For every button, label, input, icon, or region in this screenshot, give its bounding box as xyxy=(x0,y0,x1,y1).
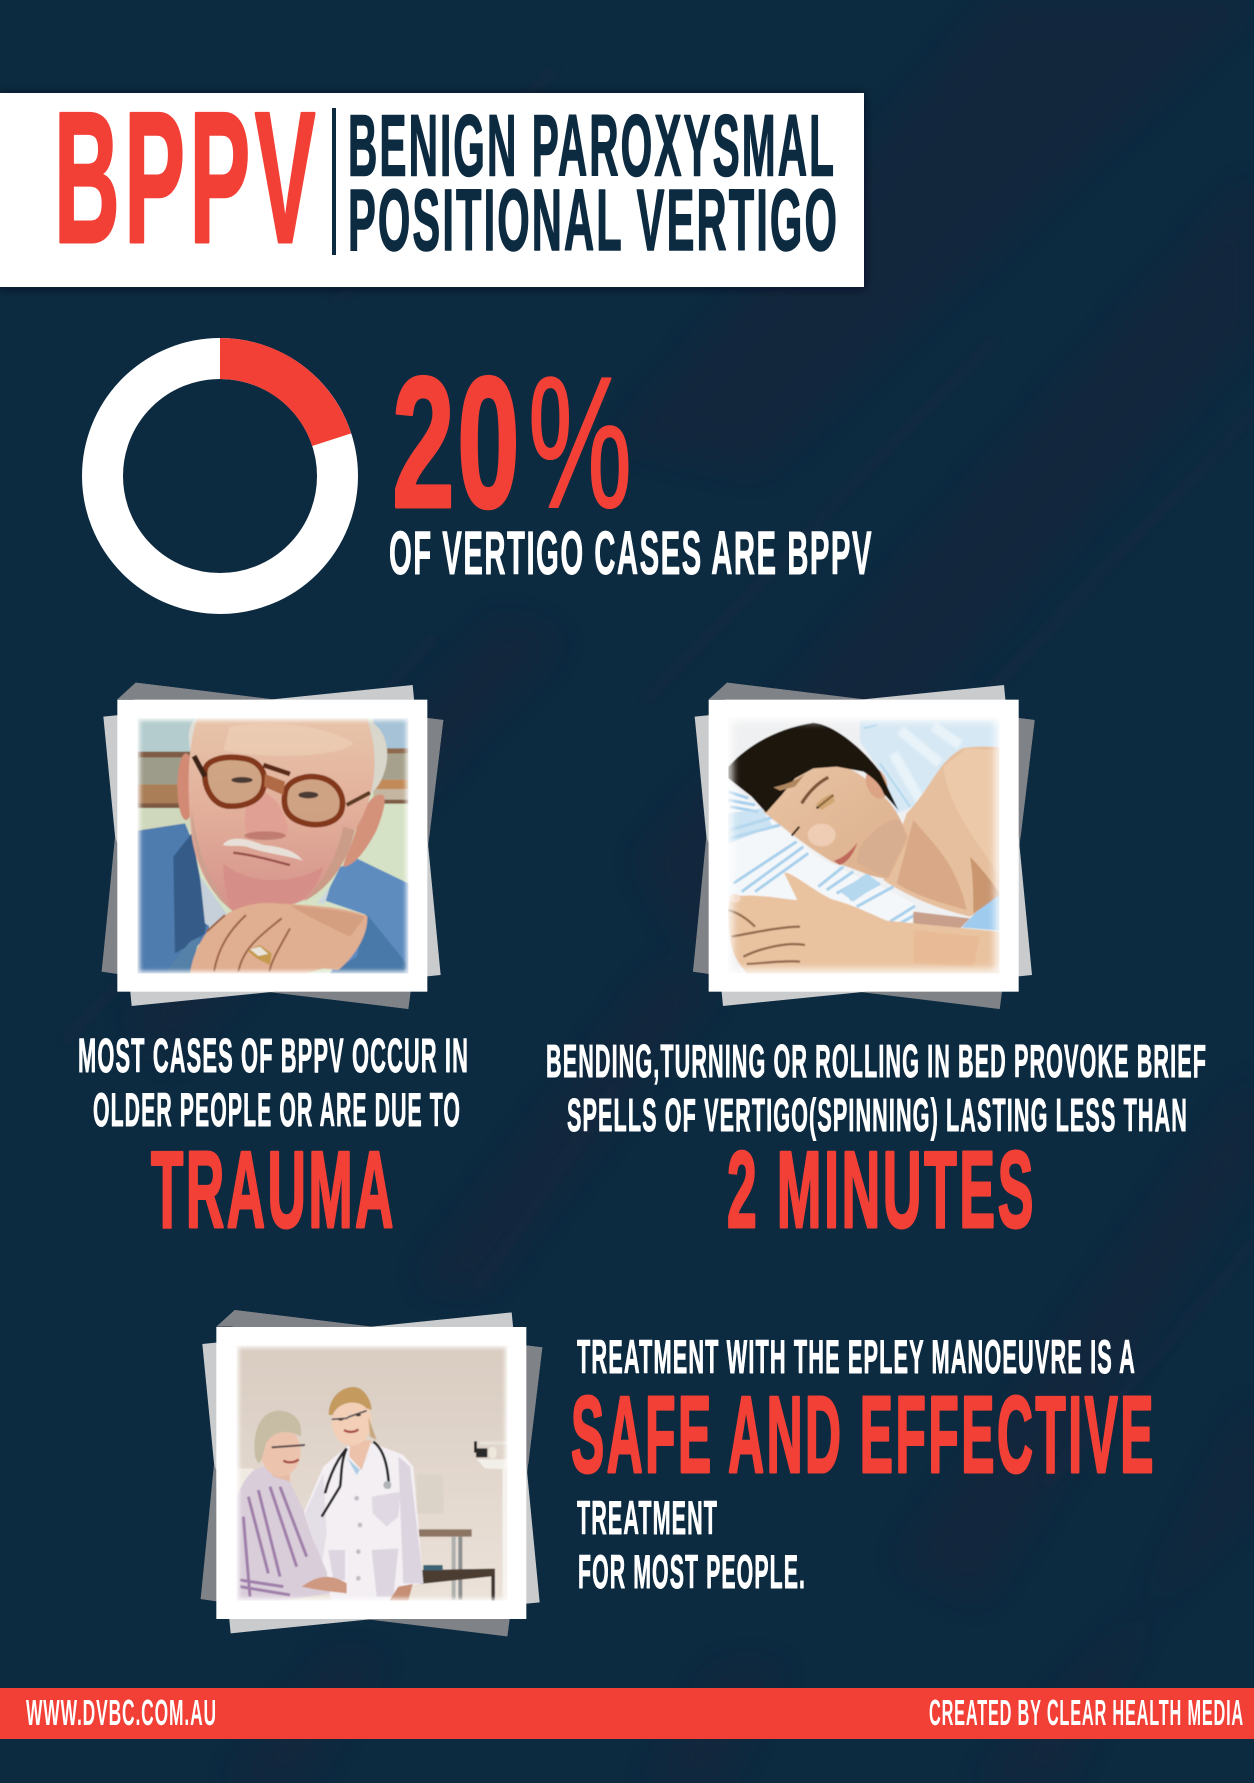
donut chart: 20% xyxy=(102,358,338,594)
body text: treatment: TREATMENT xyxy=(577,1491,718,1544)
doctor's head xyxy=(349,1440,372,1470)
patient xyxy=(237,1467,330,1601)
sweater left xyxy=(138,823,210,973)
torso xyxy=(883,747,999,917)
text: OLDER PEOPLE OR ARE DUE TO xyxy=(93,1083,461,1136)
body text: older people xyxy=(78,1030,469,1251)
body text: symptoms xyxy=(546,1035,1207,1251)
sheet and arm xyxy=(913,912,970,928)
hand xyxy=(190,903,367,973)
footer bar xyxy=(0,1688,1254,1739)
body text: treatment xyxy=(571,1330,1156,1598)
sweater right xyxy=(323,858,408,973)
back pillow xyxy=(860,720,999,813)
face xyxy=(189,718,375,912)
hair xyxy=(188,718,197,750)
front pillow xyxy=(740,800,913,920)
body text: older people: TRAUMA xyxy=(151,1129,396,1251)
footer bar: WWW.DVBC.COM.AU xyxy=(26,1692,217,1733)
moustache xyxy=(223,839,303,861)
face xyxy=(763,762,908,878)
photo card: man sleeping xyxy=(693,683,1035,1009)
glasses xyxy=(205,757,343,825)
ears xyxy=(177,752,190,820)
text: MOST CASES OF BPPV OCCUR IN xyxy=(78,1030,469,1083)
title banner: BPPV xyxy=(54,73,320,282)
collar xyxy=(200,877,227,928)
doctor xyxy=(303,1443,423,1601)
stat: 20%: % xyxy=(528,338,632,547)
title banner xyxy=(0,73,864,287)
scale xyxy=(503,1467,505,1600)
hair xyxy=(728,723,898,813)
tables xyxy=(418,1528,472,1538)
body text: treatment: FOR MOST PEOPLE. xyxy=(578,1545,806,1598)
photo card: older man xyxy=(102,683,443,1009)
patient's head xyxy=(272,1474,290,1482)
stat: 20%: 20 xyxy=(392,338,522,547)
doctor's hand xyxy=(389,1584,413,1601)
divider xyxy=(332,108,336,255)
photo card: doctor and patient xyxy=(201,1310,542,1636)
